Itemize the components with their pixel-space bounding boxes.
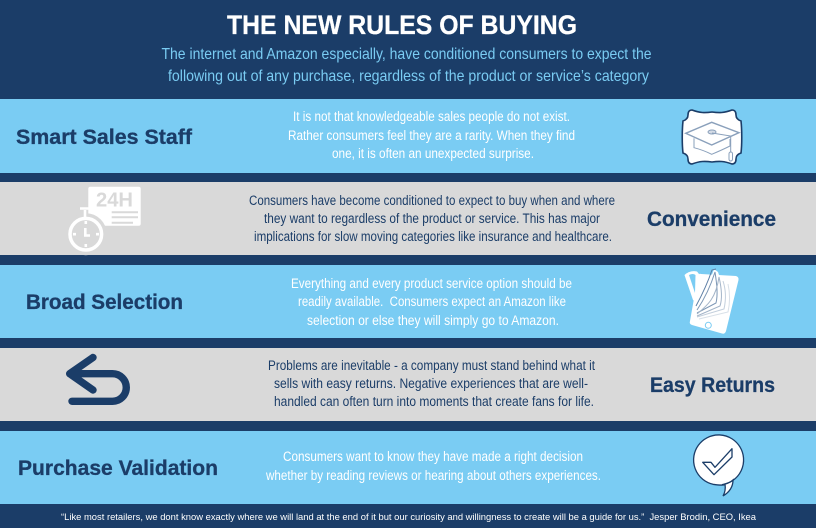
text: easy returns: Problems are inevitable - a company must stand behind what it	[268, 358, 595, 373]
heading: convenience: Convenience	[647, 208, 776, 231]
icon: 24h stopwatch: 24H	[96, 190, 133, 212]
text: smart sales staff: It is not that knowledgeable sales people do not exist.	[293, 109, 570, 124]
subtitle: The internet and Amazon especially, have conditioned consumers to expect the	[162, 46, 652, 63]
icon: return arrow	[70, 358, 126, 401]
text: broad selection: readily available. Consumers expect an Amazon like	[298, 294, 566, 309]
text: purchase validation: whether by reading reviews or hearing about others experiences.	[265, 468, 601, 483]
icon: 24h stopwatch	[65, 187, 141, 255]
text: broad selection	[291, 276, 572, 328]
text: smart sales staff: one, it is often an unexpected surprise.	[332, 146, 534, 161]
text: purchase validation: Consumers want to know they have made a right decision	[283, 449, 583, 464]
text: convenience: implications for slow moving categories like insurance and healthcare.	[254, 229, 612, 244]
title: THE NEW RULES OF BUYING	[227, 10, 577, 40]
text: broad selection: Everything and every product service option should be	[291, 276, 572, 291]
text: easy returns	[268, 358, 595, 409]
panel: purchase validation	[0, 431, 816, 504]
panel: broad selection	[0, 265, 816, 338]
icon: speech bubble with check	[694, 435, 744, 496]
icon: graduation cap badge	[682, 110, 742, 164]
panel: smart sales staff	[0, 99, 816, 173]
text: smart sales staff: Rather consumers feel they are a rarity. When they find	[288, 128, 575, 143]
text: convenience	[249, 193, 615, 244]
text: convenience: they want to regardless of the product or service. This has major	[264, 211, 600, 226]
text: convenience: Consumers have become conditioned to expect to buy when and where	[249, 193, 615, 208]
text: broad selection: selection or else they will simply go to Amazon.	[307, 313, 559, 328]
heading: purchase validation: Purchase Validation	[18, 457, 218, 480]
heading: smart sales staff: Smart Sales Staff	[16, 126, 193, 149]
subtitle: following out of any purchase, regardless of the product or service’s category	[168, 68, 649, 85]
text: smart sales staff	[288, 109, 575, 161]
text: easy returns: handled can often turn into moments that create fans for life.	[274, 394, 594, 409]
icon: tablet with pages	[684, 269, 739, 334]
heading: easy returns: Easy Returns	[650, 374, 775, 397]
text: easy returns: sells with easy returns. Negative experiences that are well-	[274, 376, 588, 391]
footer quote: “Like most retailers, we dont know exactly where we will land at the end of it but our curiosity and willingness to create will be a guide for us.” Jesper Brodin, CEO, Ikea	[61, 512, 757, 523]
panel: easy returns	[0, 348, 816, 421]
panel: convenience	[0, 182, 816, 255]
text: purchase validation	[265, 449, 601, 483]
heading: broad selection: Broad Selection	[26, 291, 183, 314]
subtitle	[162, 46, 652, 85]
